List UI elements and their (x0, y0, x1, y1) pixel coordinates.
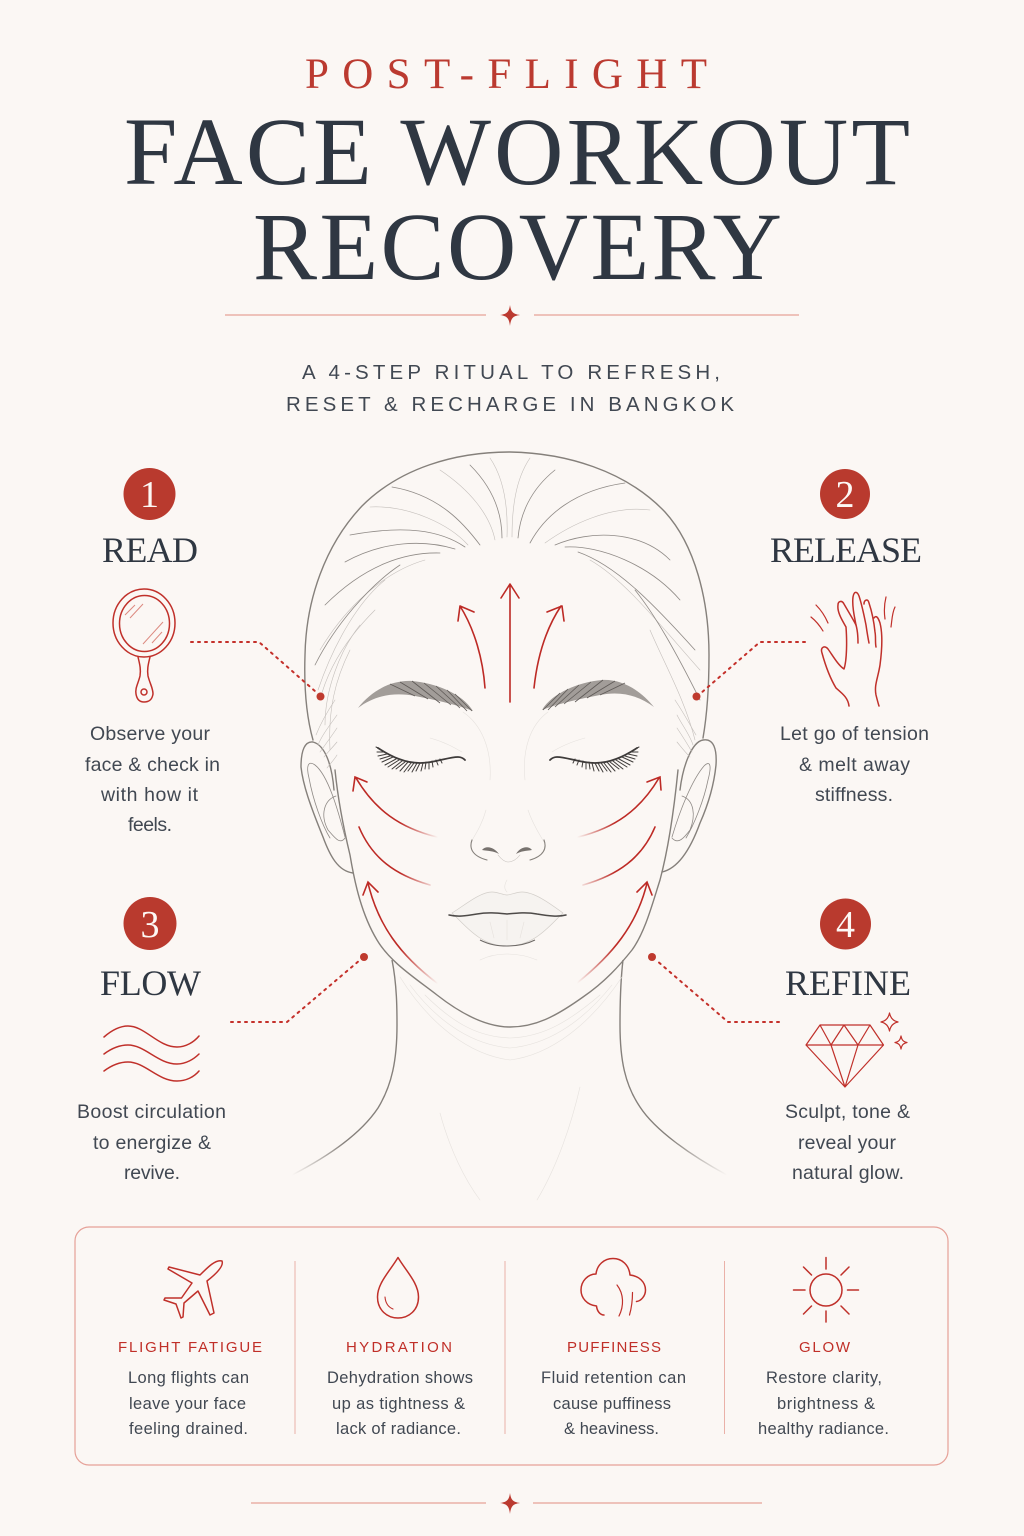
description: stiffness. (815, 784, 893, 806)
arrow: jaw left (363, 882, 437, 983)
eyebrow title: Post-Flight: POST-FLIGHT (305, 51, 707, 98)
heading: flow: FLOW (100, 963, 201, 1003)
column: glow (758, 1258, 889, 1438)
face illustration (292, 452, 727, 1200)
jaw line (335, 770, 678, 1027)
text: leave your face (129, 1395, 246, 1413)
right eyebrow (542, 680, 654, 710)
text: lack of radiance. (336, 1420, 461, 1438)
panel: step 3 flow (77, 897, 368, 1184)
description: Observe your (90, 723, 210, 745)
label: GLOW (799, 1339, 851, 1356)
icon: water drop (378, 1258, 418, 1318)
column: flight fatigue (118, 1261, 262, 1438)
description (85, 723, 220, 836)
description: Let go of tension (780, 723, 929, 745)
subtitle: RESET & RECHARGE IN BANGKOK (286, 393, 734, 416)
description: to energize & (93, 1132, 211, 1154)
arrow: upper cheek left (353, 777, 437, 837)
head and jaw outline (305, 452, 709, 740)
eye and nose bridge shading (430, 712, 585, 842)
description (77, 1101, 226, 1184)
number 1: 1 (140, 474, 159, 516)
column: hydration (327, 1258, 473, 1438)
description: Sculpt, tone & (785, 1101, 910, 1123)
connector (191, 642, 324, 700)
arrow: forehead left (458, 606, 485, 688)
badge 2 (820, 469, 870, 519)
connector (231, 953, 368, 1022)
title divider with star (225, 305, 799, 326)
text (541, 1369, 686, 1438)
text (128, 1369, 249, 1438)
text (758, 1369, 889, 1438)
description: natural glow. (792, 1162, 904, 1184)
arrow: mid cheek right (583, 827, 655, 885)
description (785, 1101, 910, 1184)
icon: sun (794, 1258, 858, 1322)
neck left (292, 960, 397, 1175)
panel: step 4 refine (648, 898, 911, 1184)
text: cause puffiness (553, 1395, 671, 1413)
icon: waving hand (811, 592, 895, 706)
number 2: 2 (836, 474, 854, 516)
column: puffiness (541, 1258, 686, 1438)
text: feeling drained. (129, 1420, 248, 1438)
text: healthy radiance. (758, 1420, 889, 1438)
label: PUFFINESS (567, 1339, 661, 1356)
description: revive. (124, 1162, 180, 1184)
description: feels. (128, 814, 172, 836)
description: & melt away (799, 754, 910, 776)
panel: step 1 read (85, 468, 324, 836)
panel: step 2 release (692, 469, 929, 806)
heading: read: READ (102, 530, 198, 570)
left eye (376, 747, 465, 772)
icon: diamond with sparkles (806, 1013, 907, 1087)
hairline strands (315, 458, 700, 768)
badge 1 (124, 468, 176, 520)
icon: waves (104, 1026, 199, 1081)
text: Fluid retention can (541, 1369, 686, 1387)
neck right (620, 960, 727, 1175)
right eye (550, 747, 639, 772)
icon: hand mirror (113, 589, 175, 702)
subtitle (286, 361, 734, 416)
text: brightness & (777, 1395, 875, 1413)
left eyebrow (358, 681, 473, 711)
massage arrows (353, 584, 661, 983)
arrow: forehead centre (501, 584, 519, 702)
heading: release: RELEASE (770, 530, 922, 570)
label: HYDRATION (346, 1339, 452, 1356)
text: up as tightness & (332, 1395, 465, 1413)
lips (449, 880, 566, 960)
connector (648, 953, 779, 1022)
text: & heaviness. (564, 1420, 659, 1438)
connector (692, 642, 805, 700)
left ear (301, 742, 353, 873)
heading: refine: REFINE (785, 963, 911, 1003)
panel: jet lag effects (75, 1227, 948, 1465)
title line: Recovery: RECOVERY (253, 193, 782, 300)
badge 3 (124, 897, 176, 950)
right ear (662, 740, 716, 872)
description: with how it (100, 784, 199, 806)
number 3: 3 (140, 904, 160, 946)
arrow: forehead right (534, 606, 564, 688)
number 4: 4 (836, 904, 855, 946)
description: Boost circulation (77, 1101, 226, 1123)
icon: airplane (164, 1261, 222, 1318)
left ear inner (308, 763, 345, 841)
arrow: jaw right (577, 882, 652, 983)
text: Dehydration shows (327, 1369, 473, 1387)
description (780, 723, 929, 806)
subtitle: A 4-STEP RITUAL TO REFRESH, (302, 361, 720, 384)
description: reveal your (798, 1132, 896, 1154)
label: FLIGHT FATIGUE (118, 1339, 262, 1356)
under-chin and collar shading (400, 977, 622, 1200)
description: face & check in (85, 754, 220, 776)
footer divider with star (251, 1493, 762, 1514)
title line: Face Workout: FACE WORKOUT (124, 98, 910, 205)
arrow: mid cheek left (359, 827, 430, 885)
text: Long flights can (128, 1369, 249, 1387)
icon: cloud (581, 1258, 646, 1316)
text: Restore clarity, (766, 1369, 882, 1387)
right ear inner (672, 764, 710, 841)
badge 4 (820, 898, 871, 950)
arrow: upper cheek right (578, 777, 661, 837)
nose (471, 840, 545, 862)
text (327, 1369, 473, 1438)
